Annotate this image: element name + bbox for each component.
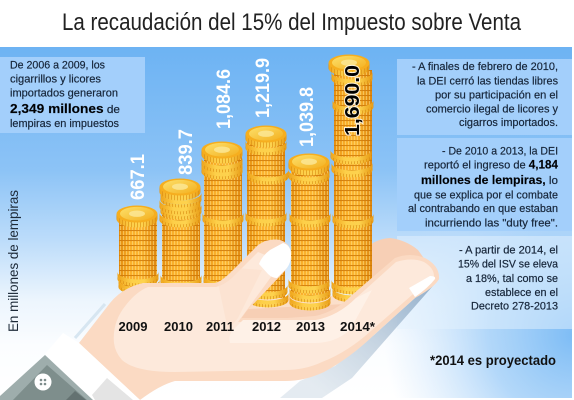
value labels: [128, 58, 364, 200]
icon: button: [34, 374, 52, 390]
panel: right note 2: [397, 138, 572, 231]
panel: left note: [0, 57, 145, 133]
coin stack 2010: [160, 178, 202, 289]
year labels: [118, 320, 375, 334]
panel: right note 3: [397, 236, 572, 329]
panel: right note 1: por su participación en el: [435, 90, 558, 102]
year labels: 2014*: [340, 320, 375, 334]
value labels: 667.1: [128, 154, 149, 200]
panel: right note 3: 15% del ISV se eleva: [458, 258, 559, 270]
sleeve: [0, 355, 93, 400]
panel: right note 1: comercio ilegal de licores y: [426, 104, 558, 116]
value labels: 1,039.8: [297, 87, 318, 147]
year labels: 2009: [118, 320, 148, 334]
year labels: 2012: [252, 320, 281, 334]
panel: right note 2: al contrabando en que estaban: [408, 203, 558, 215]
panel: right note 2: millones de lempiras, lo: [421, 173, 558, 187]
panel: left note: importados generaron: [10, 88, 118, 100]
panel: right note 2: reportó el ingreso de 4,184: [424, 158, 558, 172]
coin stack 2014: [328, 54, 374, 302]
panel: left note: 2,349 millones de: [10, 101, 120, 116]
panel: right note 3: establece en el: [485, 287, 558, 299]
cuff: [45, 304, 140, 400]
finger nail: [409, 276, 435, 297]
year labels: 2013: [296, 320, 325, 334]
palm highlight: [114, 252, 434, 372]
coin stack 2012: [246, 126, 288, 307]
year labels: 2010: [164, 320, 193, 334]
lower palm panel: [229, 290, 372, 343]
panel: right note 2: - De 2010 a 2013, la DEI: [442, 146, 558, 158]
year labels: 2011: [206, 320, 234, 334]
panel: left note: lempiras en impuestos: [10, 118, 119, 130]
coin stack 2011: [202, 142, 244, 289]
value labels: 1,690.0: [342, 65, 364, 136]
panel: left note: cigarrillos y licores: [10, 74, 101, 86]
panel: right note 1: cigarros importados.: [459, 117, 558, 129]
panel: left note: De 2006 a 2009, los: [10, 60, 105, 72]
panel: right note 3: - A partir de 2014, el: [459, 244, 558, 256]
thumb shade: [218, 268, 262, 330]
panel: right note 3: Decreto 278-2013: [471, 300, 558, 312]
hand back: palm and rear finger: [240, 238, 428, 320]
footnote: *2014 es proyectado: [430, 353, 556, 368]
coin stack 2009: [116, 206, 160, 294]
panel: right note 2: incurriendo las "duty free".: [425, 218, 558, 230]
value labels: 839.7: [176, 129, 197, 175]
panel: right note 3: a 18%, tal como se: [466, 273, 558, 285]
hand: [79, 240, 439, 400]
value labels: 1,084.6: [214, 69, 235, 129]
panel: right note 2: que se explica por el combate: [414, 190, 558, 202]
value labels: 1,219.9: [253, 58, 274, 118]
panel: right note 1: la DEI cerró las tiendas libres: [417, 76, 558, 88]
thumb nail: [259, 243, 291, 278]
panel: right note 1: [397, 59, 572, 135]
panel: right note 1: - A finales de febrero de 2010,: [412, 61, 558, 73]
coin stack 2013: [288, 154, 330, 310]
axis label: En millones de lempiras: [5, 190, 21, 332]
hand shadow: [280, 279, 439, 398]
